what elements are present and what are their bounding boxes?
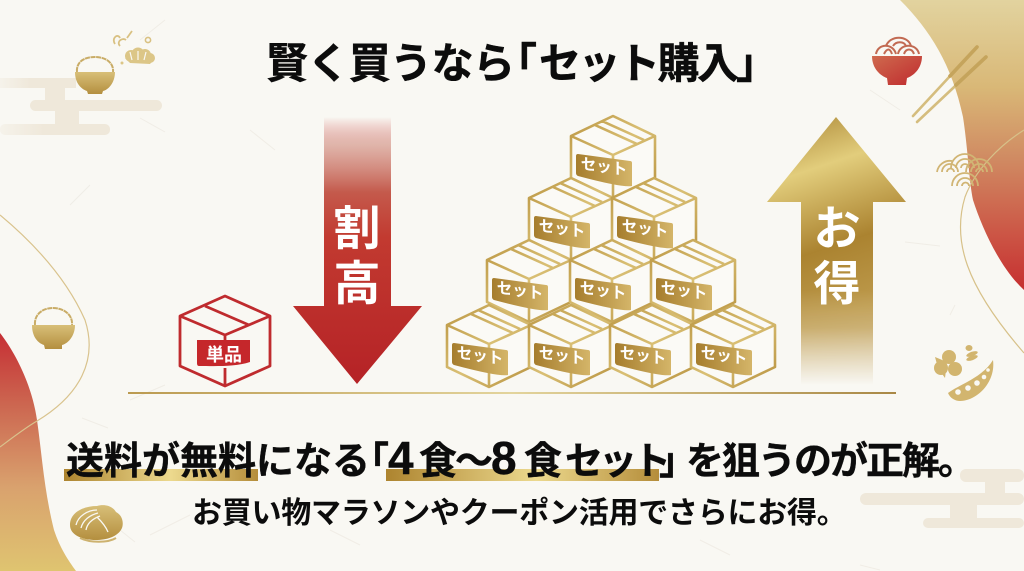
set box row 3 left	[487, 240, 571, 322]
title: セット購入	[539, 40, 738, 87]
highlight underline: 4-8 meal set	[386, 469, 659, 481]
title: 」	[736, 40, 778, 87]
set box row 4 third: セット	[620, 345, 666, 368]
set box row 4 fourth	[691, 305, 775, 387]
set box row 3 right	[651, 240, 735, 322]
set box row 3 right: セット	[661, 280, 707, 303]
set box row 4 second: セット	[539, 345, 585, 368]
set box row 1: セット	[581, 156, 627, 179]
arrow: gold up (お得)	[767, 117, 906, 385]
icon: noodle bowl	[872, 38, 922, 85]
box: single item (単品)	[180, 296, 270, 386]
set box row 3 middle	[570, 240, 654, 322]
decorative corner: gold to red top right	[900, 0, 1024, 353]
clouds top left	[0, 78, 162, 135]
main message: を狙うのが正解。	[686, 441, 974, 483]
set box row 1	[571, 116, 655, 198]
arrow: red down (割高): 割	[334, 202, 380, 255]
set box row 2 right	[612, 178, 696, 260]
main message: セット	[565, 441, 667, 483]
decorative corner: red to gold bottom left	[0, 215, 89, 571]
set box row 2 left	[529, 178, 613, 260]
icon: rice bowl top left	[75, 57, 115, 94]
set box row 2 right: セット	[622, 218, 668, 241]
arrow: gold up (お得): お	[814, 202, 860, 255]
box: single item (単品): 単品	[206, 344, 242, 365]
icon: rice bowl left	[32, 308, 75, 349]
arrow: red down (割高): 高	[334, 257, 380, 310]
main message: 」	[659, 441, 697, 483]
main message: 4	[388, 432, 414, 484]
set box row 4 fourth: セット	[701, 345, 747, 368]
clouds bottom right	[860, 469, 1024, 528]
icon: clover and peas	[934, 345, 993, 401]
set box row 3 middle: セット	[580, 280, 626, 303]
highlight underline: free shipping	[64, 469, 258, 481]
title: 賢く買うなら	[266, 40, 514, 87]
set box row 4 second	[529, 305, 613, 387]
sub message: お買い物マラソンやクーポン活用でさらにお得。	[192, 497, 846, 530]
set box row 3 left: セット	[497, 280, 543, 303]
icon: pine and swirl decoration	[114, 31, 155, 64]
icon: seigaiha waves	[937, 154, 992, 186]
main message: 〜	[455, 441, 493, 483]
set box row 4 first: セット	[457, 345, 503, 368]
main message: 送料が無料になる	[66, 441, 370, 483]
main message: 食	[524, 441, 562, 483]
main message: 食	[419, 441, 457, 483]
icon: chopsticks	[913, 47, 986, 122]
main message: 「	[351, 441, 389, 483]
title: 「	[495, 40, 537, 87]
set box row 2 left: セット	[539, 218, 585, 241]
baseline rule	[128, 392, 896, 394]
arrow: red down (割高)	[293, 117, 422, 384]
set box row 4 first	[447, 305, 531, 387]
icon: noodle plate	[70, 505, 123, 542]
arrow: gold up (お得): 得	[814, 257, 860, 310]
set box row 4 third	[610, 305, 694, 387]
main message: 8	[491, 432, 517, 484]
box pile: set boxes	[447, 116, 775, 387]
